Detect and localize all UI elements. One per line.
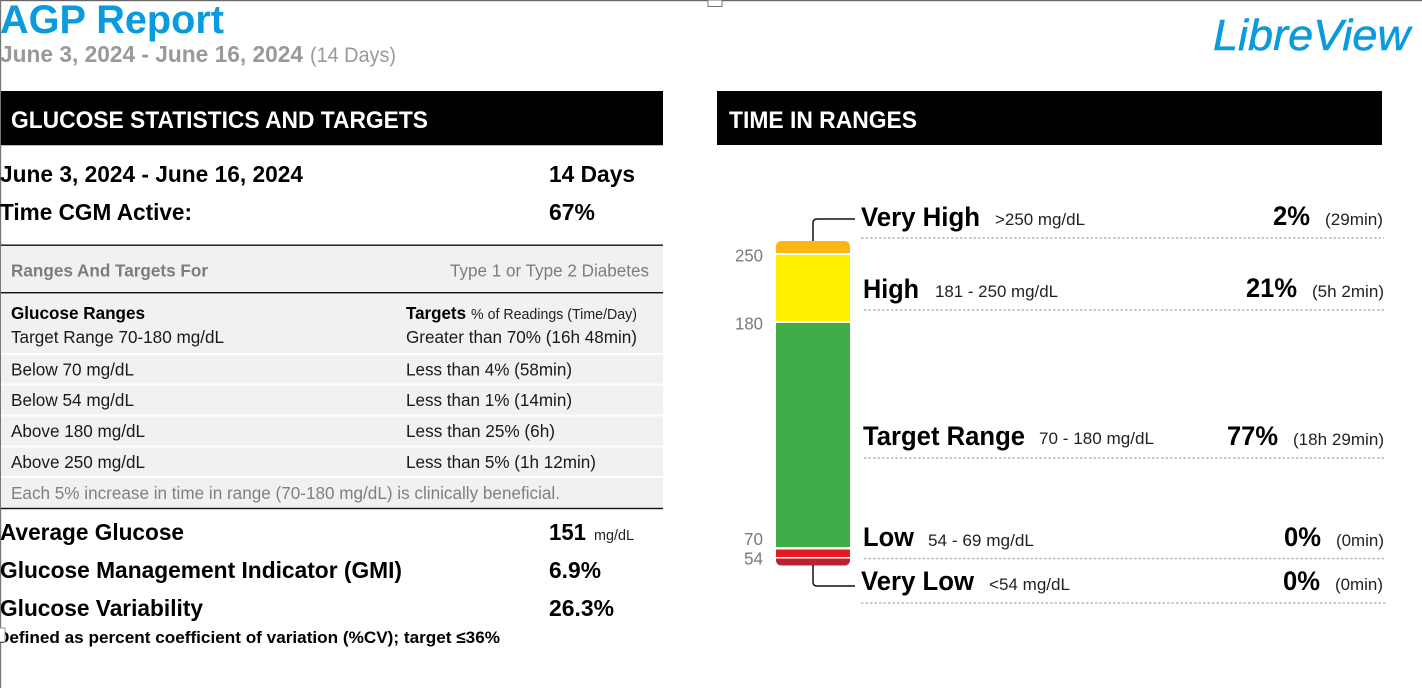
row: above 180: Less than 25% (6h) <box>406 421 555 441</box>
GMI <box>0 557 601 583</box>
panel: time in ranges <box>717 91 1387 603</box>
column headers: % of Readings (Time/Day) <box>471 307 637 323</box>
column headers <box>11 303 637 323</box>
row: high: 181 - 250 mg/dL <box>935 282 1058 301</box>
table footnote: Each 5% increase in time in range (70-180 mg/dL) is clinically beneficial. <box>11 483 560 503</box>
row: below 54: Below 54 mg/dL <box>11 390 134 410</box>
row: very low: (0min) <box>1335 575 1383 594</box>
row: below 70 <box>11 360 572 380</box>
connector: very low <box>813 565 855 586</box>
axis labels: 250 <box>735 246 763 266</box>
GMI: 6.9% <box>549 557 601 583</box>
table title: Type 1 or Type 2 Diabetes <box>450 260 649 280</box>
average glucose <box>0 519 634 545</box>
row: very high: 2% <box>1273 201 1310 231</box>
glucose variability: 26.3% <box>549 595 614 621</box>
row: high: (5h 2min) <box>1312 282 1384 301</box>
GMI: Glucose Management Indicator (GMI) <box>0 557 402 583</box>
table title <box>11 260 649 280</box>
row: very high <box>861 201 1384 238</box>
row: target range: Target Range <box>863 421 1025 451</box>
row: below 70: Below 70 mg/dL <box>11 360 134 380</box>
axis labels: 54 <box>744 548 763 568</box>
logo: LibreView: LibreView <box>1213 11 1413 60</box>
row: target range: Target Range 70-180 mg/dL <box>11 327 224 347</box>
row: above 250: Above 250 mg/dL <box>11 452 145 472</box>
row: high <box>863 273 1384 310</box>
row: low: Low <box>863 522 914 552</box>
row: target range: 77% <box>1227 421 1278 451</box>
row: below 70: Less than 4% (58min) <box>406 360 572 380</box>
row: very high: >250 mg/dL <box>995 210 1085 229</box>
report date range: (14 Days) <box>310 44 396 67</box>
date and days: 14 Days <box>549 161 635 187</box>
time CGM active: 67% <box>549 199 595 225</box>
heading: time in ranges <box>717 91 1382 145</box>
connector: very high <box>813 219 855 241</box>
axis labels <box>735 246 763 568</box>
date and days: June 3, 2024 - June 16, 2024 <box>0 161 303 187</box>
heading: glucose statistics <box>1 91 663 146</box>
glucose variability <box>0 595 614 621</box>
row: above 250 <box>11 452 596 472</box>
row: above 180: Above 180 mg/dL <box>11 421 145 441</box>
average glucose: Average Glucose <box>0 519 184 545</box>
CV definition: Defined as percent coefficient of variation (%CV); target ≤36% <box>0 628 500 647</box>
row: above 180 <box>11 421 555 441</box>
row: very low: 0% <box>1283 566 1320 596</box>
time CGM active: Time CGM Active: <box>0 199 192 225</box>
row: very low: <54 mg/dL <box>989 575 1070 594</box>
row: target range <box>11 327 637 347</box>
row: high: High <box>863 274 919 304</box>
report date range: June 3, 2024 - June 16, 2024 <box>0 41 303 67</box>
column headers: Glucose Ranges <box>11 303 145 323</box>
axis labels: 180 <box>735 314 763 334</box>
row: below 54: Less than 1% (14min) <box>406 390 572 410</box>
column headers: Targets <box>406 303 466 323</box>
row: very low <box>861 566 1387 603</box>
selection handle <box>0 628 5 642</box>
heading: glucose statistics: GLUCOSE STATISTICS AND TARGETS <box>11 107 428 134</box>
row: low: (0min) <box>1336 531 1384 550</box>
panel: glucose statistics and targets <box>0 91 663 647</box>
row: very high: Very High <box>861 202 980 232</box>
time CGM active <box>0 199 595 225</box>
stacked range bar <box>776 241 850 566</box>
average glucose: 151 <box>549 519 586 545</box>
axis labels: 70 <box>744 529 763 549</box>
average glucose: mg/dL <box>594 528 634 544</box>
row: high: 21% <box>1246 273 1297 303</box>
row: low <box>863 522 1385 558</box>
row: target range: (18h 29min) <box>1293 430 1384 449</box>
glucose variability: Glucose Variability <box>0 595 203 621</box>
row: very high: (29min) <box>1325 210 1383 229</box>
row: target range: Greater than 70% (16h 48min) <box>406 327 637 347</box>
table title: Ranges And Targets For <box>11 260 208 280</box>
heading: time in ranges: TIME IN RANGES <box>729 107 917 134</box>
row: low: 0% <box>1284 522 1321 552</box>
date and days <box>0 161 635 187</box>
row: target range <box>863 421 1385 458</box>
row: low: 54 - 69 mg/dL <box>928 531 1034 550</box>
row: very low: Very Low <box>861 566 974 596</box>
row: below 54 <box>11 390 572 410</box>
ranges and targets table <box>1 244 663 509</box>
row: target range: 70 - 180 mg/dL <box>1039 429 1154 448</box>
row: above 250: Less than 5% (1h 12min) <box>406 452 596 472</box>
